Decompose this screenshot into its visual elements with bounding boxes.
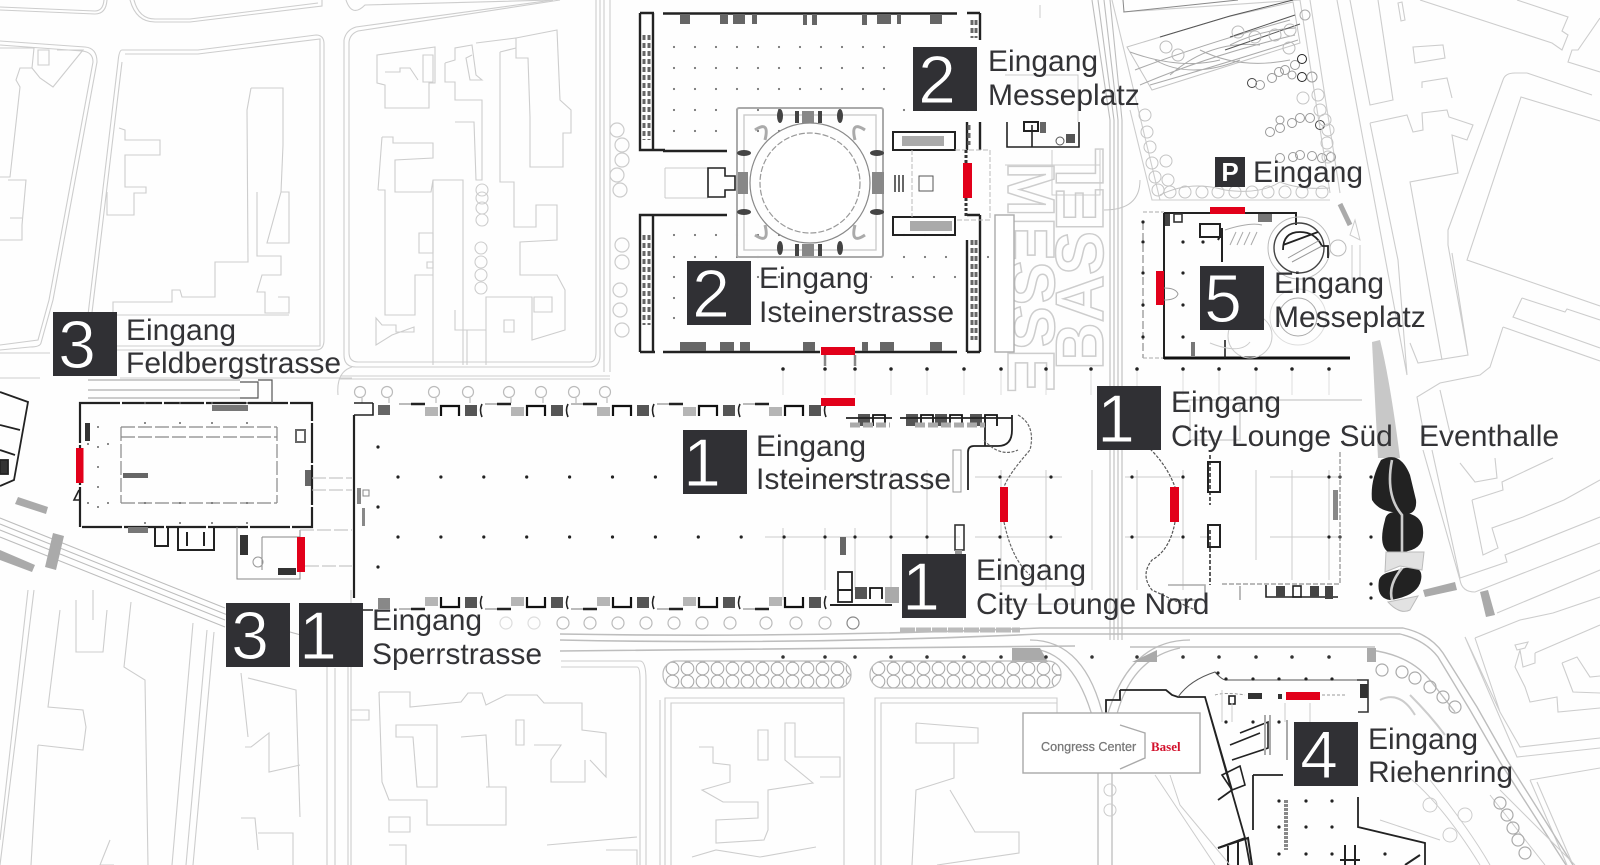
logo: Congress Center Basel <box>1023 713 1200 773</box>
label: entrance 1 Isteinerstrasse <box>683 425 951 501</box>
label: entrance 5 Messeplatz: Messeplatz <box>1274 301 1426 334</box>
label: entrances 3 and 1 Sperrstrasse: 1 <box>299 598 337 674</box>
hall 3 <box>74 380 352 579</box>
label: entrance 1 Isteinerstrasse: 1 <box>683 425 721 501</box>
label: entrance 2 Messeplatz: 2 <box>918 42 956 118</box>
label: entrance 4 Riehenring: Riehenring <box>1368 756 1513 789</box>
label: parking entrance: Eingang <box>1253 156 1363 189</box>
label: entrance 5 Messeplatz <box>1200 261 1426 337</box>
label: entrance 5 Messeplatz: Eingang <box>1274 267 1384 300</box>
hall 5 <box>1143 204 1360 358</box>
label: entrance 1 City Lounge Süd: 1 <box>1097 381 1135 457</box>
tall rectangle east of hall 2 <box>995 215 1014 352</box>
label: entrance 2 Messeplatz <box>913 42 1140 118</box>
label: entrance 1 City Lounge Süd: Eingang <box>1171 386 1281 419</box>
label: entrance 1 Isteinerstrasse: Isteinerstrasse <box>756 463 951 496</box>
label: entrance 2 Messeplatz: Messeplatz <box>988 79 1140 112</box>
hall 4 <box>1104 672 1490 865</box>
Eventhalle <box>1372 340 1424 611</box>
label: entrance 4 Riehenring <box>1294 717 1513 793</box>
label: entrance 1 City Lounge Nord: Eingang <box>976 554 1086 587</box>
label: entrance 2 Isteinerstrasse <box>687 256 954 332</box>
label: entrances 3 and 1 Sperrstrasse: Eingang <box>372 604 482 637</box>
label: entrance 5 Messeplatz: 5 <box>1204 261 1242 337</box>
label: entrance 1 City Lounge Süd <box>1097 381 1393 457</box>
label: entrance 4 Riehenring: 4 <box>1300 717 1338 793</box>
label: entrances 3 and 1 Sperrstrasse: 3 <box>231 598 269 674</box>
crosswalks <box>0 497 1495 662</box>
label: entrances 3 and 1 Sperrstrasse <box>226 598 542 674</box>
building fragment at left edge <box>0 392 28 486</box>
label: entrances 3 and 1 Sperrstrasse: Sperrstrasse <box>372 638 542 671</box>
ground lettering MESSE BASEL <box>993 147 1118 393</box>
label: entrance 4 Riehenring: Eingang <box>1368 723 1478 756</box>
park and trees, top right <box>1104 0 1336 210</box>
label: entrance 3 Feldbergstrasse: Feldbergstrasse <box>126 347 341 380</box>
tree rows <box>354 123 1531 859</box>
label: entrance 1 City Lounge Nord <box>902 549 1209 625</box>
label: entrance 3 Feldbergstrasse: Eingang <box>126 314 236 347</box>
label: entrance 2 Messeplatz: Eingang <box>988 45 1098 78</box>
label: entrance 1 Isteinerstrasse: Eingang <box>756 430 866 463</box>
logo: Congress Center Basel: Congress Center <box>1041 740 1136 754</box>
label: entrance 2 Isteinerstrasse: 2 <box>692 256 730 332</box>
label: entrance 2 Isteinerstrasse: Eingang <box>759 262 869 295</box>
small building at Messeplatz <box>1005 5 1100 195</box>
label: parking entrance: P <box>1221 157 1239 187</box>
hall 2 <box>640 13 990 366</box>
label: entrance 1 City Lounge Nord: City Lounge Nord <box>976 588 1209 621</box>
label: entrance 2 Isteinerstrasse: Isteinerstrasse <box>759 296 954 329</box>
hall 1 <box>354 400 1371 610</box>
label: entrance 1 City Lounge Nord: 1 <box>902 549 940 625</box>
ground lettering MESSE BASEL: MESSE <box>993 162 1068 393</box>
red entrance markers <box>76 163 1320 700</box>
label: entrance 3 Feldbergstrasse <box>53 307 341 383</box>
logo: Congress Center Basel: Basel <box>1151 739 1181 754</box>
label: entrance 3 Feldbergstrasse: 3 <box>58 307 96 383</box>
label: Eventhalle: Eventhalle <box>1419 420 1559 453</box>
ground lettering MESSE BASEL: BASEL <box>1042 147 1118 370</box>
column grid of the forecourt <box>765 369 1340 657</box>
label: entrance 1 City Lounge Süd: City Lounge Süd <box>1171 420 1393 453</box>
